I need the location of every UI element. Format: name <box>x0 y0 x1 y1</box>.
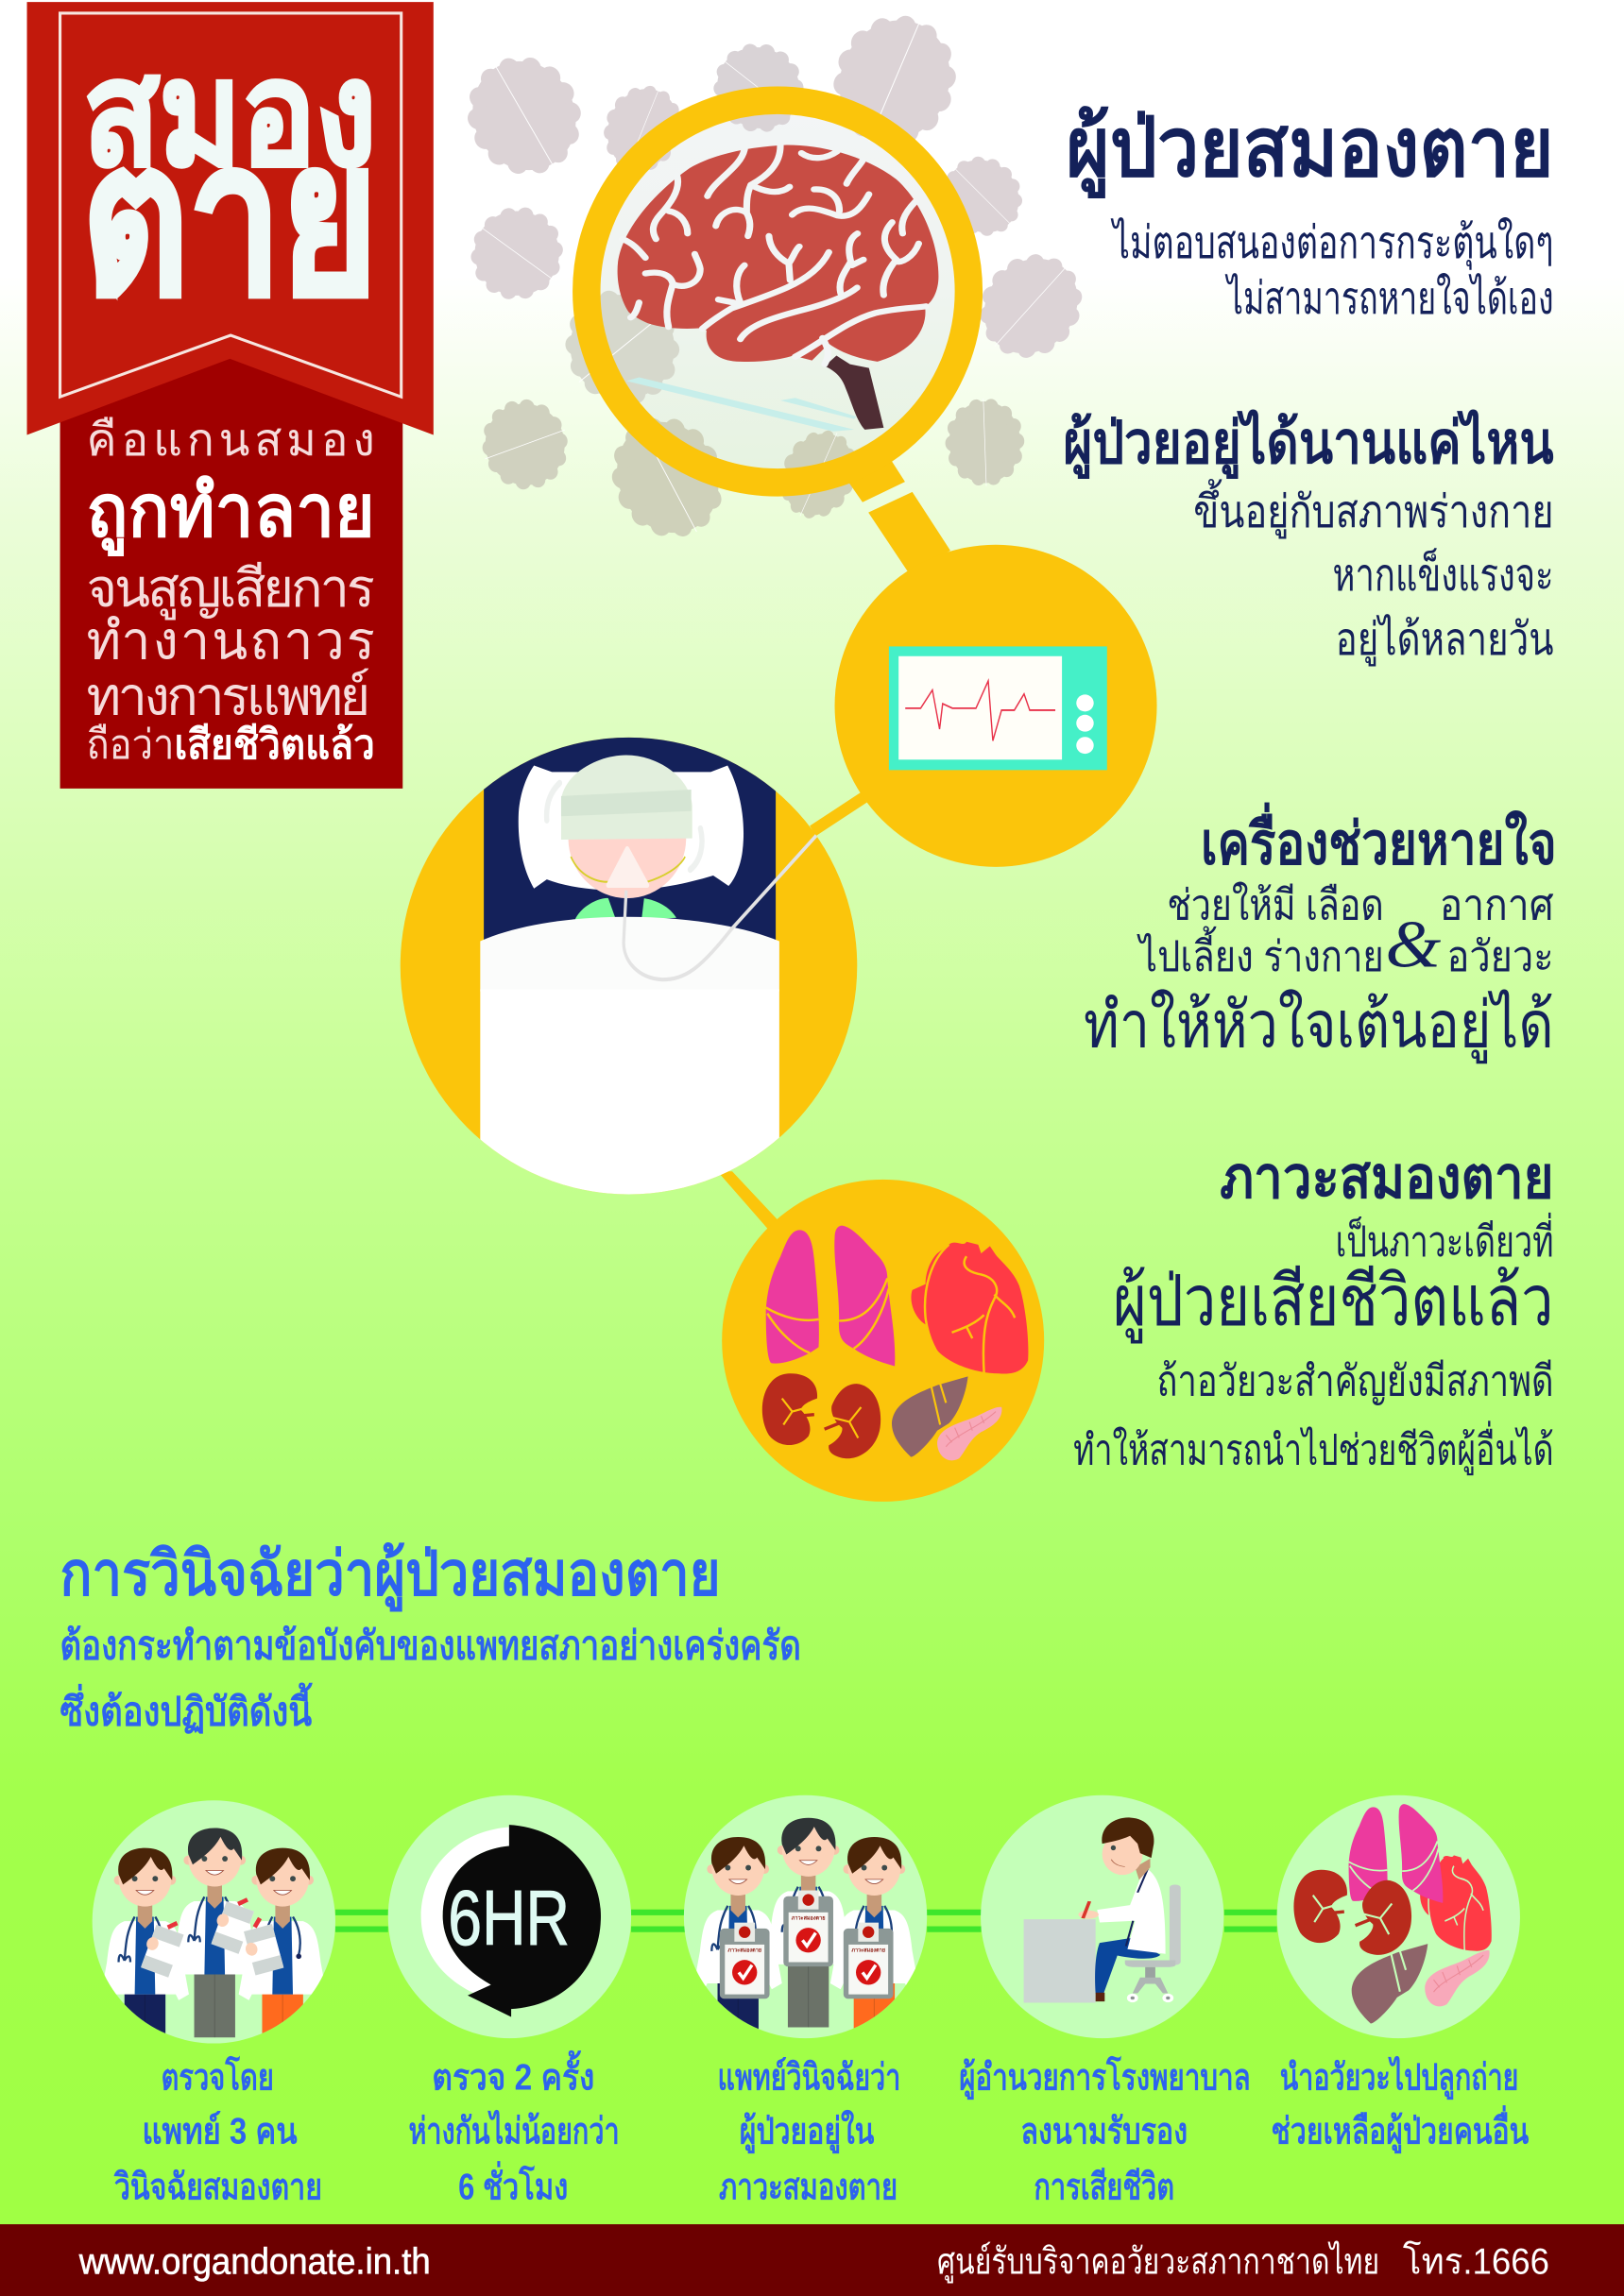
text block: ventilator: เครื่องช่วยหายใจ <box>1201 803 1557 877</box>
icon: brain <box>618 145 938 430</box>
definition text: ทางการแพทย์ <box>86 667 370 726</box>
dark red definition panel <box>60 293 402 789</box>
title ribbon panel <box>27 2 434 789</box>
label: step 3: แพทย์วินิจฉัยว่า <box>718 2056 900 2098</box>
text block: brain death state: ภาวะสมองตาย <box>1220 1146 1554 1211</box>
text block: ventilator: อากาศ <box>1440 881 1554 929</box>
patient in bed <box>480 728 816 1204</box>
text block: how long the patient lives: ผู้ป่วยอยู่ได้นานแค่ไหน <box>1063 409 1554 479</box>
label: step 3: ผู้ป่วยอยู่ใน <box>740 2110 875 2154</box>
organisation and phone: โทร.1666 <box>1403 2241 1549 2283</box>
label: step 1: ตรวจโดย <box>162 2055 274 2098</box>
lens glass <box>594 109 961 474</box>
text block: ventilator <box>1084 803 1557 1064</box>
icon: lungs <box>766 1226 895 1367</box>
title: brain death <box>82 33 378 338</box>
magnifier ring <box>587 100 968 483</box>
label: step 2: 6 ชั่วโมง <box>458 2161 568 2208</box>
yellow disc <box>722 1180 1044 1502</box>
heading: diagnosis: ซึ่งต้องปฏิบัติดังนี้ <box>60 1681 313 1733</box>
text block: brain death state <box>1073 1146 1554 1475</box>
label: step 2 <box>408 2049 620 2208</box>
ribbon outline <box>60 13 402 397</box>
icon: organs <box>1293 1804 1492 2024</box>
text block: how long the patient lives <box>1063 409 1554 667</box>
yellow disc <box>835 545 1157 867</box>
yellow disc <box>401 738 857 1195</box>
icon: director at desk <box>1024 1817 1181 2002</box>
footer bar <box>0 2224 1624 2296</box>
text block: brain dead patient: ผู้ป่วยสมองตาย <box>1066 102 1554 199</box>
label: 6HR: 6HR <box>448 1876 570 1962</box>
connector: monitor to patient <box>810 792 867 836</box>
step disc <box>1277 1795 1520 2038</box>
label: step 3 <box>718 2056 900 2208</box>
heading: diagnosis: การวินิจฉัยว่าผู้ป่วยสมองตาย <box>60 1539 721 1612</box>
magnifier handle <box>849 461 950 574</box>
step disc <box>388 1795 631 2038</box>
icon: doctors with charts: ภาวะสมองตาย <box>851 1947 885 1954</box>
organs circle <box>722 1180 1044 1502</box>
website: www.organdonate.in.th <box>78 2242 431 2283</box>
label: step 4: การเสียชีวิต <box>1034 2168 1174 2208</box>
label: step 1: วินิจฉัยสมองตาย <box>113 2168 322 2208</box>
definition text: ถูกทำลาย <box>86 470 375 556</box>
definition text <box>86 416 375 768</box>
connector: patient to organs <box>718 1171 778 1230</box>
icon: doctors with notes <box>104 1828 323 2038</box>
text block: ventilator: ไปเลี้ยง ร่างกาย <box>1137 926 1384 980</box>
icon: doctors with charts: ภาวะสมองตาย <box>792 1915 825 1922</box>
magnifier with brain illustration <box>446 0 1103 574</box>
label: step 4: ผู้อำนวยการโรงพยาบาล <box>959 2055 1251 2100</box>
text block: ventilator: & <box>1385 907 1442 981</box>
label: step 1: แพทย์ 3 คน <box>142 2111 298 2152</box>
label: step 1 <box>113 2055 322 2208</box>
icon: doctors with charts: ภาวะสมองตาย <box>727 1947 761 1954</box>
icon: liver <box>892 1376 968 1457</box>
glass reflection <box>626 377 856 432</box>
step 4: hospital director signs <box>981 1795 1223 2038</box>
icon: heart monitor <box>889 646 1107 770</box>
label: step 5 <box>1271 2055 1530 2154</box>
step 3: diagnosis confirmed <box>684 1795 927 2047</box>
heading: diagnosis: ต้องกระทำตามข้อบังคับของแพทยสภาอย่างเคร่งครัด <box>60 1624 801 1668</box>
step 1: three doctors <box>93 1800 335 2057</box>
step disc <box>981 1795 1223 2038</box>
background faded brains <box>446 0 1103 557</box>
label: step 5: ช่วยเหลือผู้ป่วยคนอื่น <box>1271 2105 1530 2154</box>
icon: clock arrow <box>421 1825 601 2016</box>
title: brain death: สมอง <box>83 33 376 196</box>
text block: ventilator: ช่วยให้มี เลือด <box>1167 881 1384 929</box>
organisation and phone: ศูนย์รับบริจาคอวัยวะสภากาชาดไทย <box>937 2241 1379 2284</box>
label: step 2: ห่างกันไม่น้อยกว่า <box>408 2110 620 2152</box>
heading: diagnosis <box>60 1539 801 1733</box>
label: step 4 <box>959 2055 1251 2208</box>
step 2: six hours <box>388 1795 631 2038</box>
definition text: คือแกนสมอง <box>86 416 375 466</box>
icon: pancreas <box>937 1407 1001 1460</box>
definition text: ถือว่า <box>86 723 174 768</box>
icon: heart <box>911 1242 1028 1374</box>
monitor circle <box>835 545 1157 867</box>
text block: how long the patient lives: ขึ้นอยู่กับสภาพร่างกาย <box>1193 479 1554 539</box>
text block: ventilator: อวัยวะ <box>1446 932 1554 980</box>
definition text: เสียชีวิตแล้ว <box>174 723 375 768</box>
step labels <box>113 2049 1530 2208</box>
text block: how long the patient lives: หากแข็งแรงจะ <box>1333 548 1554 601</box>
step 5: organ transplant <box>1277 1795 1520 2038</box>
label: step 3: ภาวะสมองตาย <box>719 2168 897 2208</box>
text block: brain dead patient <box>1066 102 1554 324</box>
icon: doctors with charts <box>694 1818 918 2047</box>
step connectors <box>335 1910 1277 1932</box>
label: step 4: ลงนามรับรอง <box>1020 2112 1188 2152</box>
title: brain death: ตาย <box>82 99 378 338</box>
ribbon <box>27 2 434 434</box>
definition text: จนสูญเสียการ <box>86 558 375 621</box>
icon: kidneys <box>762 1373 880 1458</box>
label: step 2: ตรวจ 2 ครั้ง <box>432 2049 594 2098</box>
text block: how long the patient lives: อยู่ได้หลายวัน <box>1336 613 1554 667</box>
text block: brain death state: เป็นภาวะเดียวที่ <box>1336 1212 1554 1266</box>
label: step 5: นำอวัยวะไปปลูกถ่าย <box>1280 2055 1518 2100</box>
step disc <box>93 1800 335 2044</box>
definition text: ทำงานถาวร <box>86 611 375 671</box>
patient circle <box>401 728 857 1204</box>
step disc <box>684 1795 927 2038</box>
